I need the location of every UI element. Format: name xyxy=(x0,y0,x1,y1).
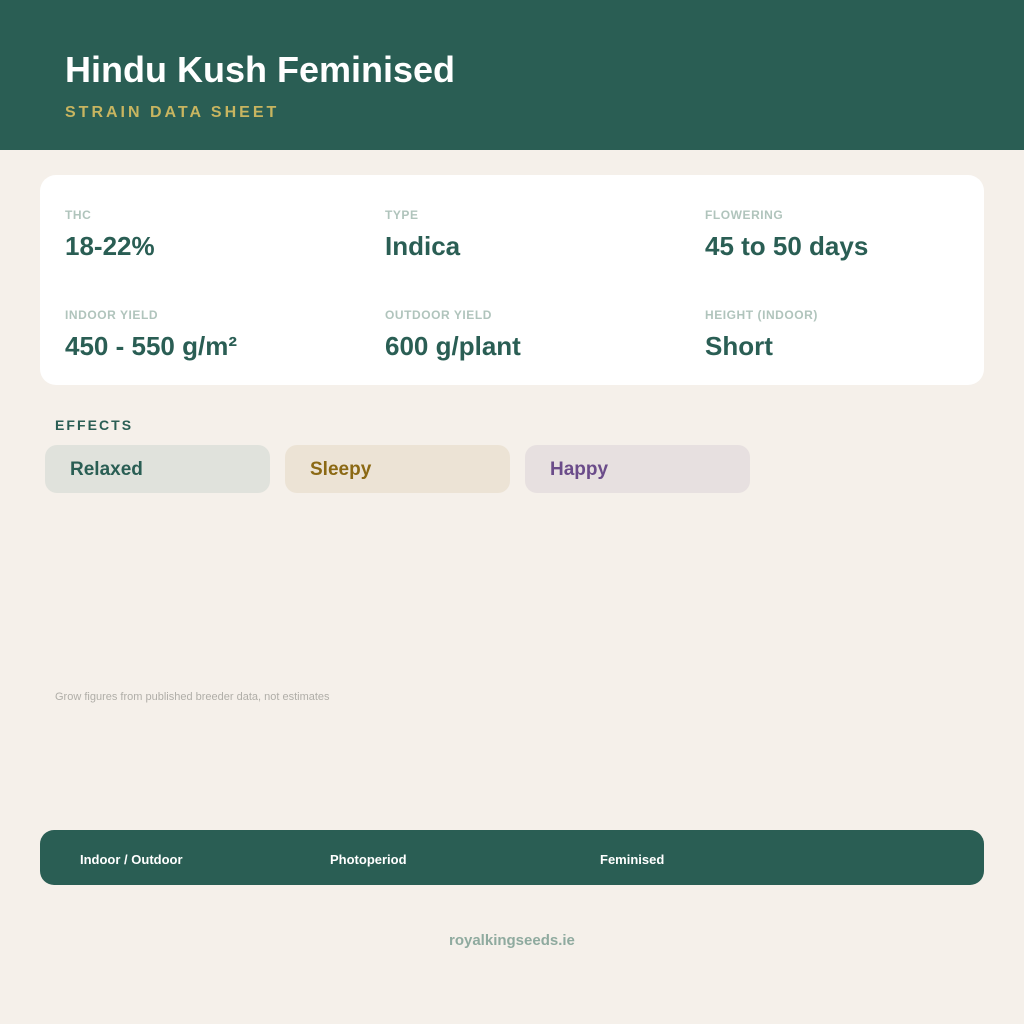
stat: indoor yield xyxy=(65,308,237,361)
footer item: photoperiod: Photoperiod xyxy=(330,852,407,867)
chip: happy: Happy xyxy=(550,459,608,480)
chip: sleepy xyxy=(285,445,510,493)
footer item: indoor / outdoor: Indoor / Outdoor xyxy=(80,852,183,867)
chip: relaxed: Relaxed xyxy=(70,459,143,480)
stat: THC xyxy=(65,208,155,261)
panel: strain stats xyxy=(40,175,984,385)
effects heading: EFFECTS xyxy=(55,417,133,433)
stat: type: TYPE xyxy=(385,208,419,222)
title: Hindu Kush Feminised xyxy=(65,49,455,90)
stat: height: HEIGHT (INDOOR) xyxy=(705,308,818,322)
stat: outdoor yield: 600 g/plant xyxy=(385,331,521,361)
footer item: feminised: Feminised xyxy=(600,852,664,867)
stat: height xyxy=(705,308,818,361)
source note: Grow figures from published breeder data, not estimates xyxy=(55,691,330,703)
chip: happy xyxy=(525,445,750,493)
stat: flowering xyxy=(705,208,868,261)
website: royalkingseeds.ie xyxy=(449,932,575,949)
stat: outdoor yield xyxy=(385,308,521,361)
chip: relaxed xyxy=(45,445,270,493)
stat: flowering: FLOWERING xyxy=(705,208,783,222)
chip: sleepy: Sleepy xyxy=(310,459,371,480)
stat: type: Indica xyxy=(385,231,460,261)
subtitle: STRAIN DATA SHEET xyxy=(65,104,279,121)
stat: indoor yield: 450 - 550 g/m² xyxy=(65,331,237,361)
stat: type xyxy=(385,208,460,261)
stat: height: Short xyxy=(705,331,773,361)
stat: THC: 18-22% xyxy=(65,231,155,261)
footer bar xyxy=(40,830,984,885)
stat: THC: THC xyxy=(65,208,91,222)
stat: flowering: 45 to 50 days xyxy=(705,231,868,261)
header band xyxy=(0,0,1024,150)
stat: outdoor yield: OUTDOOR YIELD xyxy=(385,308,492,322)
stat: indoor yield: INDOOR YIELD xyxy=(65,308,158,322)
